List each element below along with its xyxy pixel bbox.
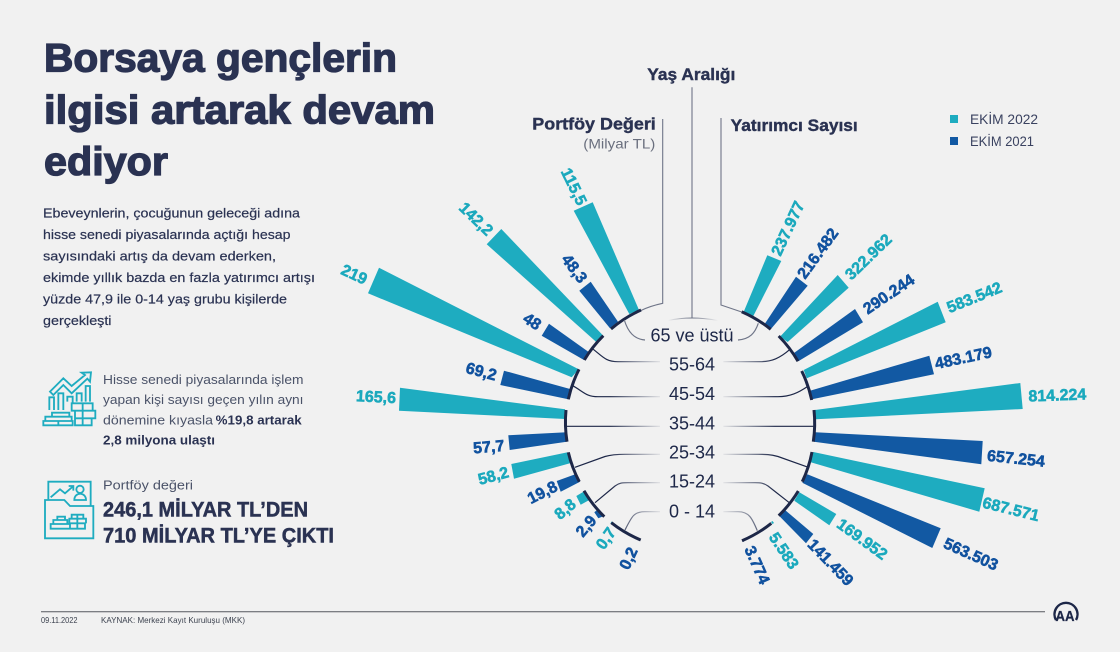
- bar: 65+ 2022 portfolio: 115,5: [557, 166, 589, 208]
- intro text block: yüzde 47,9 ile 0-14 yaş grubu kişilerde: [43, 292, 287, 306]
- bar: 35-44 2022 investors: 814.224: [1028, 386, 1087, 406]
- intro text block: gerçekleşti: [43, 313, 112, 328]
- intro text block: sayısındaki artış da devam ederken,: [43, 248, 276, 264]
- bar: 45-54 2021 portfolio: [464, 360, 571, 399]
- bar: 65+ 2022 investors: [743, 199, 809, 316]
- intro text block: ekimde yıllık bazda en fazla yatırımcı artışı: [43, 270, 315, 285]
- bar: 35-44 2021 portfolio: 57,7: [473, 438, 505, 458]
- bar: 45-54 2021 portfolio: 69,2: [464, 360, 498, 385]
- bar: 55-64 2022 portfolio: [455, 199, 603, 342]
- bar: 25-34 2022 portfolio: 58,2: [476, 464, 511, 489]
- heading: portfolio value: [532, 114, 656, 152]
- stat text: portfolio value: Portföy değeri: [103, 477, 193, 492]
- legend: EKİM 2022: [970, 110, 1038, 127]
- bar: 0-14 2021 investors: 3.774: [740, 544, 772, 587]
- bar: 65+ 2022 investors: 237.977: [769, 199, 809, 259]
- heading: portfolio value: Portföy Değeri: [532, 114, 656, 133]
- bar: 45-54 2021 investors: 483.179: [933, 344, 994, 373]
- bar: 15-24 2021 portfolio: 2,9: [573, 513, 600, 541]
- footer rule: [41, 611, 1045, 613]
- icon: portfolio folder: [45, 482, 93, 538]
- bar: 55-64 2022 investors: [780, 231, 896, 342]
- bar: 55-64 2021 investors: [794, 272, 918, 361]
- bar: 25-34 2021 portfolio: 19,8: [525, 479, 561, 508]
- bar: 55-64 2021 portfolio: [520, 310, 588, 360]
- bar: 15-24 2022 investors: [794, 492, 890, 564]
- title: [44, 37, 435, 184]
- footer source: KAYNAK: Merkezi Kayıt Kuruluşu (MKK): [101, 615, 245, 625]
- stat text: portfolio value: 246,1 MİLYAR TL’DEN: [103, 499, 308, 522]
- icon: AA logo: AA: [1056, 608, 1075, 625]
- heading: age range: Yaş Aralığı: [647, 65, 735, 84]
- bar: 35-44 2021 investors: [814, 432, 1046, 471]
- bar: 45-54 2022 portfolio: 219: [338, 262, 370, 289]
- bar: 15-24 2021 investors: 141.459: [804, 536, 856, 590]
- footer date: 09.11.2022: [41, 615, 78, 625]
- bar: 35-44 2021 portfolio: [473, 432, 567, 458]
- bar: 25-34 2021 investors: [802, 474, 1001, 574]
- bar: 15-24 2022 portfolio: [552, 491, 589, 523]
- intro text block: hisse senedi piyasalarında açtığı hesap: [43, 227, 290, 242]
- bar: 55-64 2021 investors: 290.244: [861, 272, 918, 318]
- bar: 65+ 2021 investors: 216.482: [795, 225, 842, 282]
- age group arcs: [565, 310, 815, 541]
- stat text: investors: Hisse senedi piyasalarında işlem: [103, 372, 304, 387]
- bar: 0-14 2022 portfolio: 0,7: [593, 525, 620, 553]
- bar: 45-54 2022 investors: [804, 279, 1005, 378]
- stat text: investors: 2,8 milyona ulaştı: [103, 433, 215, 448]
- bar: 15-24 2022 investors: 169.952: [833, 516, 890, 564]
- bar: 55-64 2022 portfolio: 142,2: [455, 199, 496, 240]
- age range labels: 15-24: [669, 472, 715, 492]
- intro text block: [43, 206, 315, 328]
- chart: investor count bars (right): [740, 199, 1087, 590]
- legend: [950, 110, 1038, 149]
- bar: 65+ 2021 portfolio: 48,3: [558, 252, 590, 287]
- bar: 55-64 2021 portfolio: 48: [520, 310, 544, 334]
- bar: 15-24 2021 investors: [779, 510, 856, 590]
- bar: 45-54 2022 portfolio: [338, 262, 579, 377]
- heading: portfolio value: (Milyar TL): [583, 136, 655, 152]
- stat text: portfolio value: [103, 477, 334, 548]
- title: Borsaya gençlerin: [44, 37, 397, 81]
- stat text: portfolio value: 710 MİLYAR TL’YE ÇIKTI: [103, 525, 334, 548]
- bar: 65+ 2021 portfolio: [558, 252, 618, 328]
- age range labels: 0 - 14: [669, 501, 715, 521]
- bar: 35-44 2022 portfolio: [356, 388, 565, 419]
- bar: 45-54 2022 investors: 583.542: [945, 279, 1005, 317]
- stat text: investors: dönemine kıyasla: [103, 412, 214, 427]
- bar: 65+ 2022 portfolio: [557, 166, 639, 314]
- stat text: investors: %19,8 artarak: [216, 412, 302, 427]
- bar: 35-44 2022 investors: [815, 383, 1087, 419]
- bar: 25-34 2022 portfolio: [476, 452, 570, 489]
- bar: 15-24 2022 portfolio: 8,8: [552, 496, 580, 523]
- bar: 35-44 2022 portfolio: 165,6: [356, 388, 396, 407]
- chart: portfolio value bars (left): [338, 166, 642, 572]
- bar: 25-34 2022 investors: [811, 452, 1041, 525]
- title: ediyor: [44, 140, 168, 184]
- title: ilgisi artarak devam: [44, 88, 435, 132]
- bar: 0-14 2022 investors: 5.583: [765, 530, 801, 573]
- header connector lines: [641, 87, 742, 320]
- age range labels: 45-54: [669, 384, 715, 404]
- bar: 65+ 2021 investors: [764, 225, 842, 329]
- bar: 25-34 2021 portfolio: [525, 474, 580, 508]
- stat text: investors: [103, 372, 304, 448]
- bar: 35-44 2021 investors: 657.254: [986, 448, 1046, 471]
- age range labels: [650, 326, 734, 521]
- bar: 25-34 2021 investors: 563.503: [941, 535, 1001, 574]
- stat text: investors: yapan kişi sayısı geçen yılın aynı: [103, 392, 304, 407]
- leader lines from arcs to age labels: [567, 320, 814, 531]
- age range labels: 35-44: [669, 413, 715, 433]
- heading: investor count: Yatırımcı Sayısı: [731, 116, 858, 135]
- icon: rising chart with coin stacks: [43, 372, 95, 425]
- bar: 0-14 2021 portfolio: 0,2: [617, 545, 642, 572]
- age range labels: 25-34: [669, 443, 715, 463]
- legend: EKİM 2021: [970, 132, 1034, 149]
- bar: 45-54 2021 investors: [810, 344, 994, 399]
- bar: 25-34 2022 investors: 687.571: [981, 495, 1041, 525]
- bar: 55-64 2022 investors: 322.962: [842, 231, 896, 284]
- intro text block: Ebeveynlerin, çocuğunun geleceği adına: [43, 206, 301, 220]
- age range labels: 65 ve üstü: [650, 326, 734, 346]
- age range labels: 55-64: [669, 355, 715, 375]
